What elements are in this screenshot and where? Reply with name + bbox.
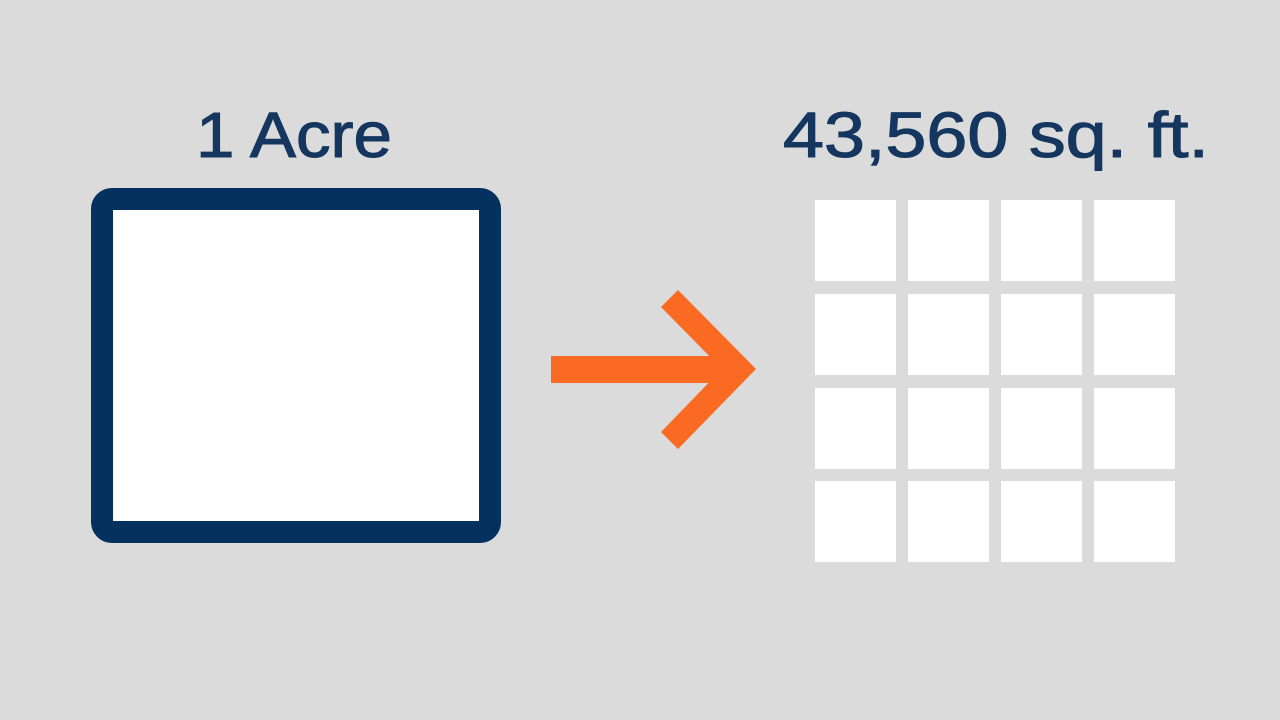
heading: 1 Acre: 1 Acre — [196, 99, 392, 171]
arrow — [551, 290, 756, 449]
heading: 43,560 sq. ft.: 43,560 sq. ft. — [783, 99, 1209, 171]
grid of 16 squares — [815, 200, 1175, 562]
acre square — [102, 199, 490, 532]
